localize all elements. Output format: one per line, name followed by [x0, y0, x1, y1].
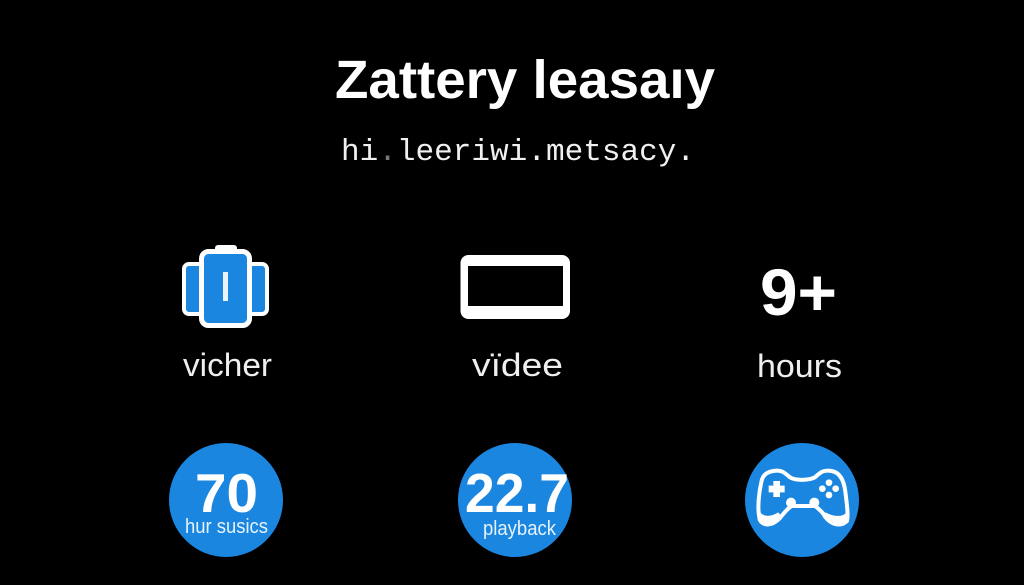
panel: vicher — [183, 245, 272, 383]
icon: screen outline — [460, 255, 570, 319]
label: vicher: vicher — [183, 347, 272, 383]
icon: battery cluster — [184, 245, 267, 326]
label: videe: vïdee — [472, 347, 563, 383]
title: Zattery leasaıy — [335, 50, 715, 110]
number: 22.7: 22.7 — [465, 462, 569, 524]
badge: 70 hur susics — [169, 443, 283, 557]
number: 70: 70 — [195, 462, 258, 524]
panel: hours — [757, 255, 842, 384]
subtitle: hi.leeriwi.metsacy. — [341, 135, 695, 170]
badge: 22.7 playback — [458, 443, 572, 557]
caption: hur susics: hur susics — [185, 516, 268, 538]
panel: video — [460, 255, 570, 383]
badge: game controller — [745, 443, 859, 557]
label: hours: hours — [757, 348, 842, 384]
icon: game controller — [758, 471, 849, 527]
caption: playback: playback — [483, 518, 557, 540]
stat: 9+: 9+ — [760, 255, 837, 329]
